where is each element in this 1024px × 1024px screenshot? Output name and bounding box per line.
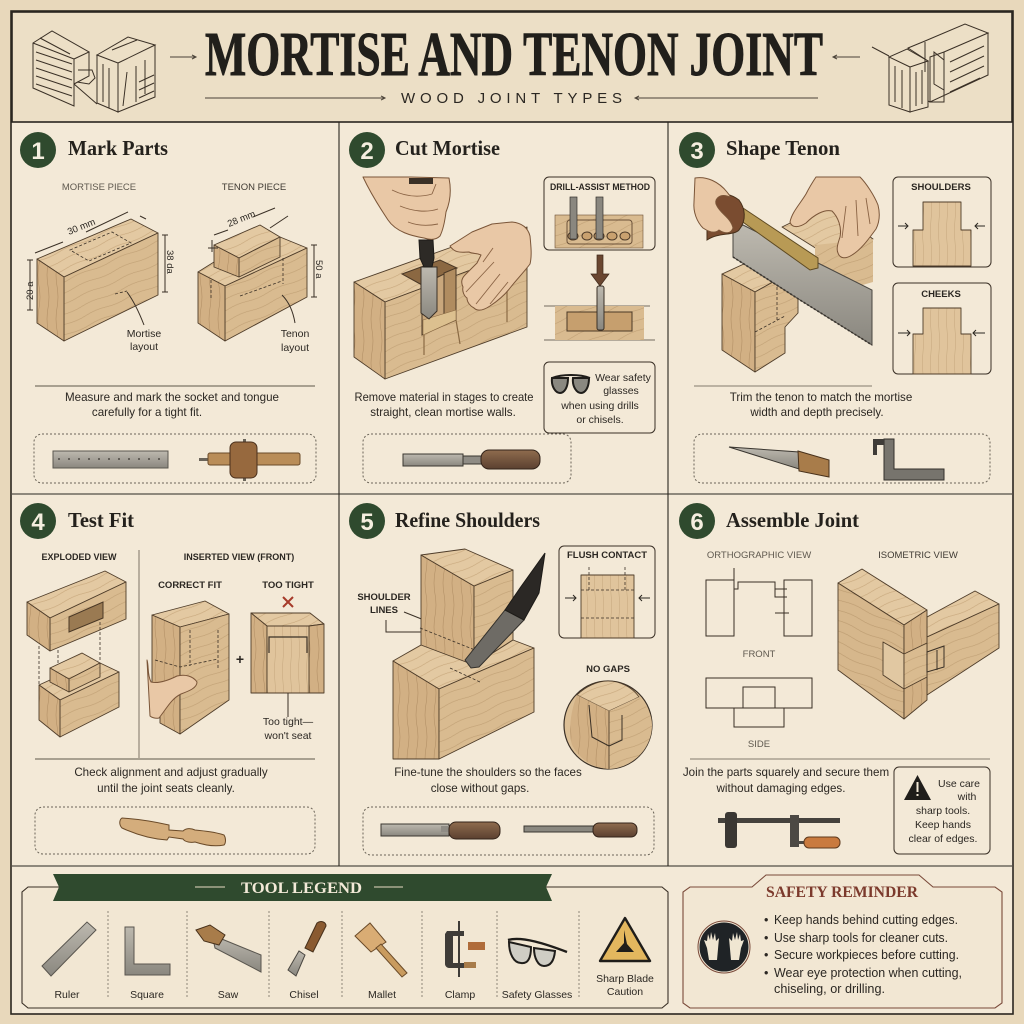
heading: Shape Tenon [726,136,840,160]
safety list: • [764,913,768,927]
shoulders diagram [893,177,991,267]
view labels: EXPLODED VIEW [41,552,117,562]
panel 1: mark parts [20,132,324,483]
block with mortise and chisel [354,227,527,379]
tenon piece drawing [198,208,324,341]
isometric joint drawing [838,569,999,719]
too tight note: Too tight— [263,716,314,728]
panel 4: test fit [20,503,324,854]
tool box: ruler and marking gauge [34,434,316,483]
subtitle: WOOD JOINT TYPES [401,90,622,107]
step number 6 [679,503,715,539]
heading: Mark Parts [68,136,168,160]
safety glasses note: Wear safety [595,372,652,384]
view labels: FRONT [743,649,776,660]
icon: bar clamp [718,812,840,848]
too tight drawing [251,613,324,717]
safety glasses note: glasses [603,385,639,397]
tool box: chisel [363,434,571,483]
safety list: Wear eye protection when cutting, [774,966,962,980]
tool box: chisel and file [363,807,654,855]
red x mark [283,597,293,607]
labels: pieces: TENON PIECE [222,182,286,193]
safety list: chiseling, or drilling. [774,982,885,996]
no gaps detail [564,664,652,769]
mortise piece drawing: 38 da [164,250,175,274]
block with tenon and chisel [393,549,545,759]
tool: ruler: Ruler [54,989,80,1001]
callouts: layout [130,341,158,353]
view labels: INSERTED VIEW (FRONT) [184,552,294,562]
description [730,391,912,419]
tenon piece drawing: 28 mm [226,209,257,230]
safety glasses note [544,362,655,433]
icon: upper hand [363,177,450,239]
warning box: sharp tools. [916,805,970,817]
warning box: Keep hands [915,819,971,831]
warning box: clear of edges. [909,833,977,845]
step number 3 [679,132,715,168]
panel 2: cut mortise [349,132,655,483]
safety list: Keep hands behind cutting edges. [774,913,958,927]
shoulders diagram: SHOULDERS [911,182,971,193]
tool: chisel: Chisel [289,989,319,1001]
front orthographic drawing [706,568,812,636]
tool: clamp: Clamp [445,989,475,1001]
panel 6: assemble joint [679,503,999,854]
header arrows and rules [170,55,860,100]
mortise piece drawing [25,212,175,341]
safety list: • [764,966,768,980]
drill-assist result [544,286,655,340]
side orthographic drawing [706,678,812,727]
tenon piece drawing: 50 a [313,260,324,279]
plus mark: + [236,651,244,667]
tool: square: Square [130,989,164,1001]
warning box: Use care [938,778,980,790]
legend banner: TOOL LEGEND [241,880,362,897]
tool legend panel [22,874,668,1008]
mortise piece drawing: 30 mm [66,217,97,238]
too tight note [263,716,314,742]
description: width and depth precisely. [749,406,884,419]
view labels: CORRECT FIT [158,580,222,591]
step number 4 [20,503,56,539]
safety list [764,913,962,996]
callouts: Mortise [127,328,161,340]
icon: tenon saw [733,208,872,345]
view labels [41,552,314,591]
legend banner [53,874,552,901]
legend separators [108,911,579,999]
safety glasses note: or chisels. [576,414,624,426]
description [74,766,268,795]
view labels [707,550,958,750]
step number 3: 3 [690,138,704,165]
tool: clamp [445,921,485,1001]
description: Remove material in stages to create [354,391,534,404]
safety list: • [764,948,768,962]
shoulder lines label: SHOULDER [357,592,411,603]
icon: right hand on block [790,177,879,258]
tool box: wooden handle [35,807,315,854]
description: close without gaps. [431,782,529,795]
too tight note: won't seat [264,730,312,742]
description: until the joint seats cleanly. [97,782,235,795]
description [354,391,534,419]
labels: pieces: MORTISE PIECE [62,182,136,193]
exploded view drawing [27,571,126,737]
warning box [894,767,990,854]
tool: sharp blade caution: Caution [607,986,643,998]
description: Check alignment and adjust gradually [74,766,268,779]
warning box: with [957,791,976,803]
step number 2 [349,132,385,168]
description: straight, clean mortise walls. [370,406,516,419]
callouts [127,328,309,354]
description [65,391,279,419]
drill-assist method panel: DRILL-ASSIST METHOD [550,182,650,193]
cheeks diagram [893,283,991,374]
grid lines [12,122,1012,866]
safety list: Secure workpieces before cutting. [774,948,959,962]
step number 5: 5 [360,509,374,536]
correct fit drawing [147,601,229,734]
step number 4: 4 [31,509,45,536]
step number 1 [20,132,56,168]
shoulder lines label: LINES [370,605,398,616]
safety heading: SAFETY REMINDER [766,884,918,901]
drill-assist method panel [544,177,655,250]
cheeks diagram: CHEEKS [921,289,961,300]
view labels: TOO TIGHT [262,580,314,591]
tool: safety glasses [502,939,572,1001]
tool: square [125,927,170,1001]
step number 1: 1 [31,138,45,165]
header band [12,12,1012,122]
heading: Test Fit [68,508,134,532]
tool: saw [196,925,261,1001]
icon: right joint sketch [872,24,988,112]
description [683,766,889,795]
description: without damaging edges. [716,782,845,795]
tool: sharp blade caution: Sharp Blade [596,973,654,985]
view labels: ISOMETRIC VIEW [878,550,958,561]
tool box: saw and square [694,434,990,483]
safety reminder panel [683,875,1002,1008]
view labels: ORTHOGRAPHIC VIEW [707,550,811,561]
description: Join the parts squarely and secure them [683,766,889,779]
icon: lower hand [450,222,531,310]
safety list: • [764,931,768,945]
panel 3: shape tenon [679,132,991,483]
step number 6: 6 [690,509,704,536]
description: Trim the tenon to match the mortise [730,391,912,404]
description [394,766,582,795]
tool: ruler [42,922,96,1001]
tool: chisel [288,922,326,1001]
tool: mallet [355,923,407,1001]
icon: left joint sketch [33,31,155,112]
heading: Cut Mortise [395,136,500,160]
safety list: Use sharp tools for cleaner cuts. [774,931,948,945]
step number 2: 2 [360,138,374,165]
mortise piece drawing: 20 a [25,281,36,300]
shoulder lines label [357,592,424,632]
safety glasses note: when using drills [560,400,639,412]
callouts: layout [281,342,309,354]
labels: pieces [62,182,286,193]
callouts: Tenon [281,328,309,340]
icon: thumb on block [147,660,197,718]
tool: safety glasses: Safety Glasses [502,989,572,1001]
wood block being sawn [722,205,873,372]
heading: Refine Shoulders [395,508,540,532]
no gaps detail: NO GAPS [586,664,630,675]
panel 5: refine shoulders [349,503,655,855]
tool: mallet: Mallet [368,989,396,1001]
description: Fine-tune the shoulders so the faces [394,766,582,779]
step number 5 [349,503,385,539]
description: Measure and mark the socket and tongue [65,391,279,404]
view labels: SIDE [748,739,770,750]
tool: sharp blade caution [596,918,654,998]
icon: hands in circle [698,921,750,973]
flush contact diagram: FLUSH CONTACT [567,550,647,561]
tool: saw: Saw [218,989,239,1001]
icon: left hand on saw [694,178,744,240]
heading: Assemble Joint [726,508,859,532]
description: carefully for a tight fit. [92,406,202,419]
flush contact diagram [559,546,655,638]
arrow: drill to chisel [591,255,609,286]
